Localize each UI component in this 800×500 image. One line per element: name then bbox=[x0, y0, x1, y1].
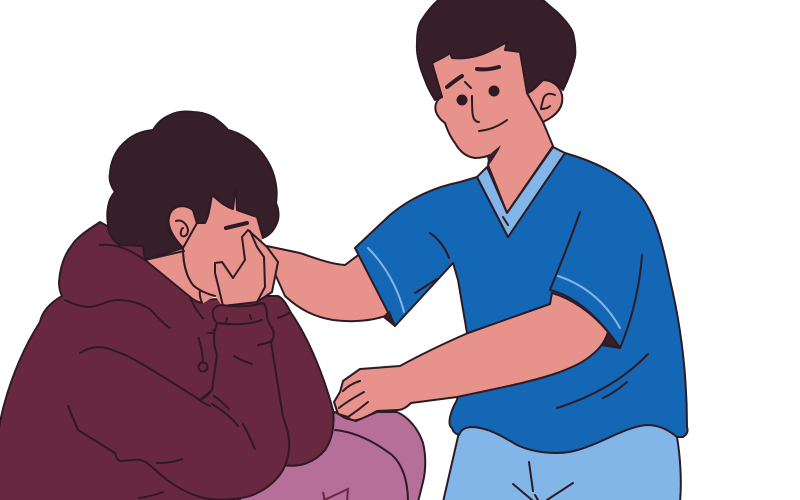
hoodie body bbox=[0, 222, 334, 500]
cuff and sleeve details bbox=[217, 313, 289, 364]
left sleeve shadow bbox=[384, 312, 395, 326]
sleeve shadow bbox=[602, 332, 620, 348]
shirt creases bbox=[557, 354, 648, 408]
chin shadow bbox=[487, 145, 501, 165]
right sleeve bbox=[550, 212, 642, 348]
neck outline bbox=[145, 248, 215, 303]
figure: standing man bbox=[262, 0, 688, 500]
eyes bbox=[456, 86, 500, 106]
figure: seated person bbox=[0, 111, 425, 500]
jeans fold lines bbox=[513, 462, 573, 500]
pants bbox=[230, 412, 425, 500]
shirt with left sleeve bbox=[355, 153, 688, 453]
hood lines bbox=[65, 245, 213, 333]
ear detail bbox=[541, 94, 555, 109]
drawstring bbox=[193, 325, 208, 372]
arm and hand on knee bbox=[334, 293, 608, 420]
collar inner seam bbox=[503, 217, 508, 225]
closed eye bbox=[226, 223, 247, 228]
neck and face skin bbox=[145, 180, 268, 306]
pants details bbox=[320, 430, 408, 500]
right ear bbox=[527, 80, 562, 122]
ear bbox=[169, 206, 197, 248]
eyebrows bbox=[447, 67, 499, 87]
finger line bbox=[250, 231, 265, 302]
front forearm sleeve with open outlines bbox=[68, 303, 289, 500]
neck and face bbox=[432, 40, 553, 213]
hair bbox=[107, 111, 279, 260]
nose and mouth bbox=[465, 82, 507, 131]
right sleeve seam highlight bbox=[558, 276, 620, 328]
sleeve creases bbox=[139, 390, 255, 498]
hair bbox=[417, 0, 575, 100]
hand covering face bbox=[215, 230, 278, 306]
jeans bbox=[443, 415, 681, 500]
collar bbox=[477, 147, 565, 237]
reaching arm bbox=[262, 245, 410, 321]
left sleeve details bbox=[368, 233, 449, 312]
fingers bbox=[339, 381, 368, 417]
ear detail bbox=[176, 221, 188, 236]
